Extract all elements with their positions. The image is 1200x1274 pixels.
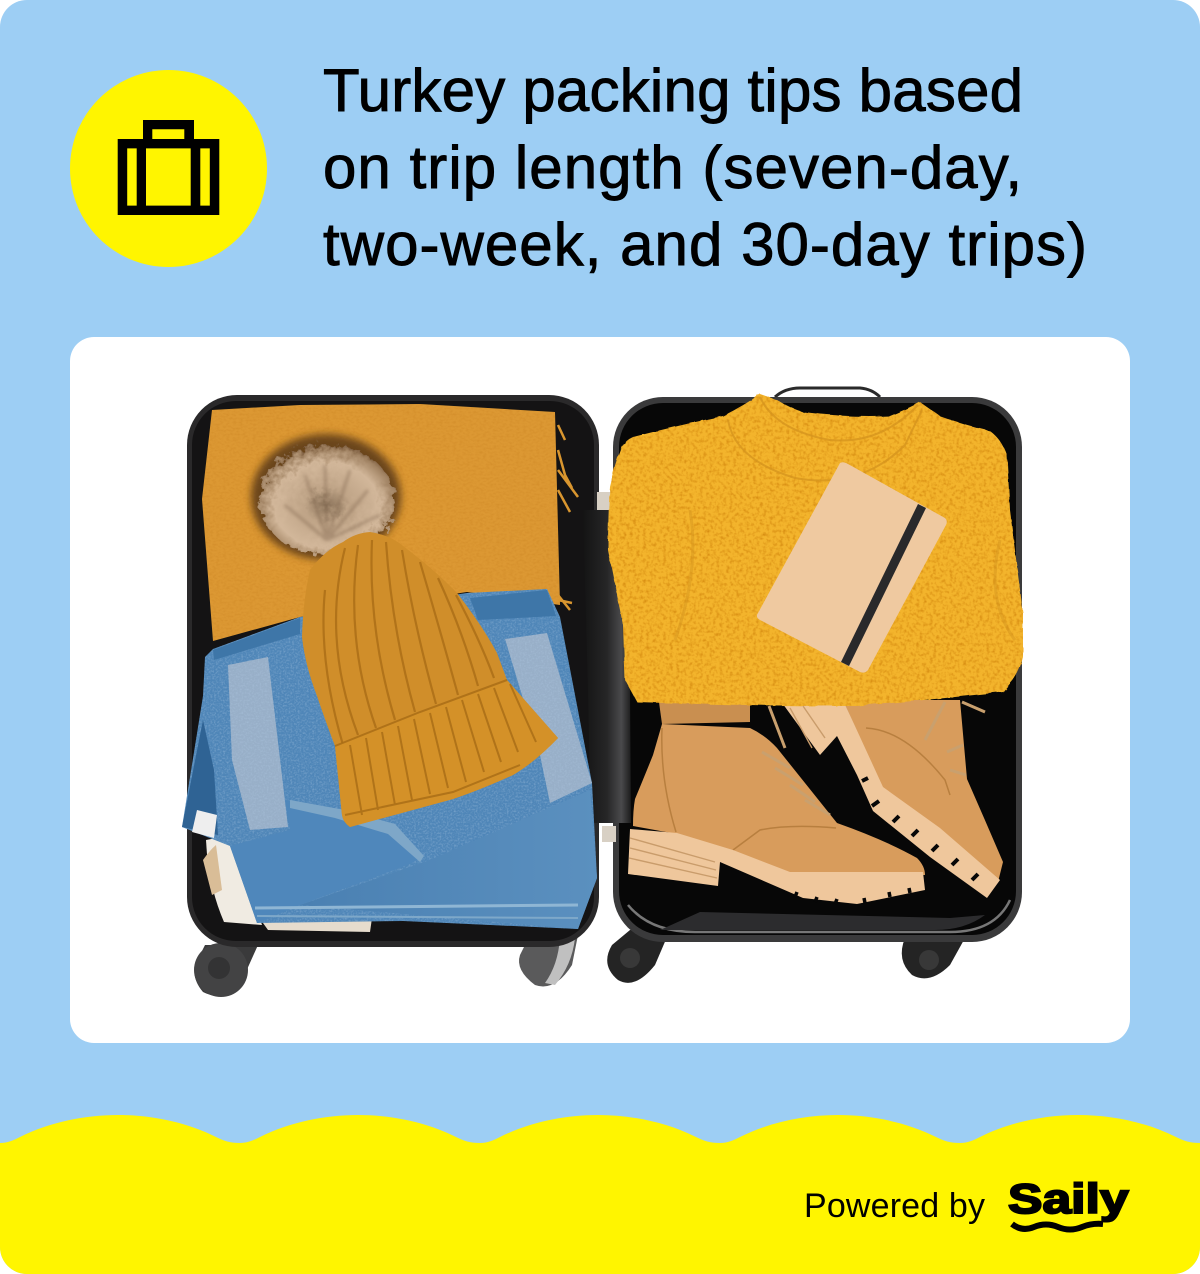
footer wave band [0,1115,1200,1274]
sweater neckline [728,410,922,481]
beanie cuff [335,680,558,827]
scarf fringe [558,425,578,610]
left suitcase shell [187,395,599,947]
jeans [182,589,597,929]
powered by label: Powered by [804,1187,985,1225]
pompom [251,434,401,560]
logo: Saily: Saily [1008,1175,1129,1222]
right suitcase shell [613,397,1022,942]
illustration: open packed suitcase [182,388,1023,997]
right suitcase handle [775,388,880,397]
centre strap [583,492,631,842]
left boot sole tread [795,888,910,904]
jeans cuff left [228,657,288,830]
wheels [194,930,965,997]
title: Turkey packing tips based [323,57,1023,124]
scarf [202,404,560,641]
title: on trip length (seven-day, [323,134,1022,201]
sweater [608,394,1023,706]
title [323,57,1087,278]
icon: suitcase in yellow circle [70,70,267,267]
notebook [757,462,947,673]
title: two-week, and 30-day trips) [323,211,1087,278]
notebook band [841,504,926,666]
beanie [302,532,558,827]
left boot [628,695,925,904]
right boot sole tread [862,778,978,880]
panel: white image card [70,337,1130,1043]
beanie ribs [323,540,494,745]
right boot [780,700,1003,898]
jeans cuff right [505,633,592,803]
cream clothing under jeans [206,835,262,925]
